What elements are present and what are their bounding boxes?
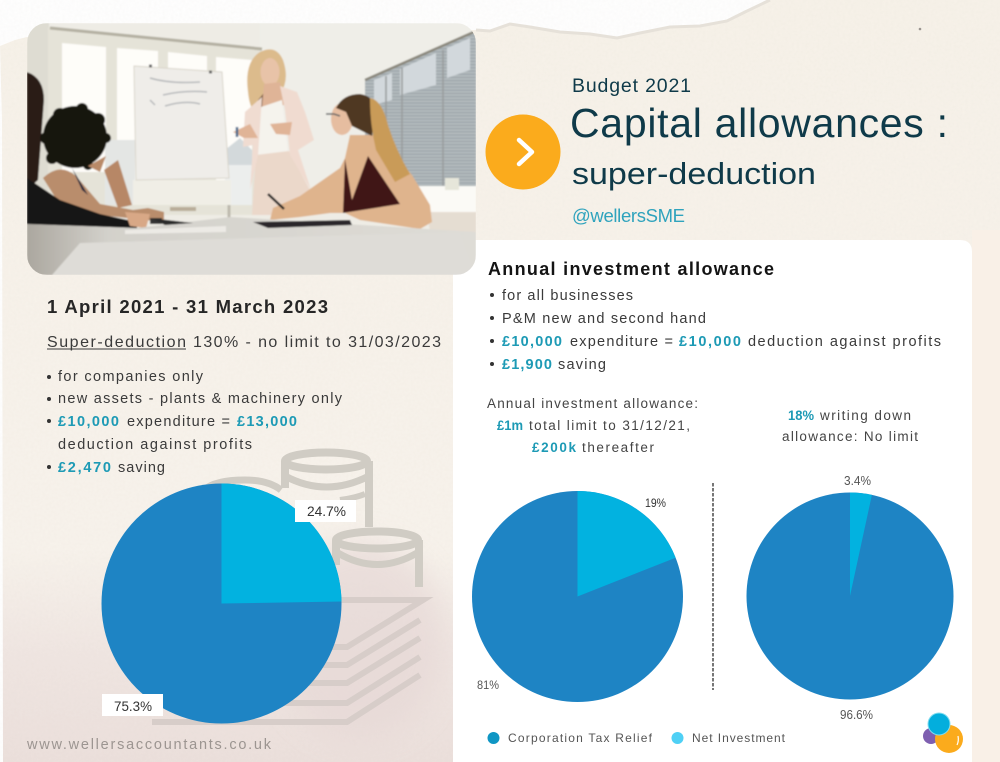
flipchart [133, 66, 231, 225]
label: 3.4%: 3.4% [844, 474, 871, 488]
seated woman with ponytail [268, 94, 432, 229]
right text block: annual investment allowance [488, 259, 941, 373]
pie chart: annual investment allowance [472, 491, 683, 702]
label: 81%: 81% [477, 680, 499, 692]
caption: writing down allowance: allowance: No limit [782, 429, 918, 444]
bullet list [490, 288, 941, 373]
bullet list: £10,000 [58, 414, 119, 430]
logo: three bubbles [923, 713, 963, 753]
legend [488, 731, 786, 745]
bullet list: £10,000 [502, 334, 562, 350]
sub-heading: super-deduction: 130% - no limit to 31/03/2023 [193, 334, 441, 351]
pie chart: writing down allowance [746, 474, 954, 722]
main title: Capital allowances : [570, 100, 948, 146]
caption: writing down allowance [782, 408, 918, 444]
table [27, 217, 476, 275]
bullet list: expenditure = [570, 334, 673, 350]
bullet list: for companies only [58, 369, 204, 385]
bullet list: £2,470 [58, 460, 111, 476]
footer: website: www.wellersaccountants.co.uk [26, 737, 272, 753]
divider: dashed line between charts [712, 483, 714, 690]
caption: annual investment allowance limits: Annual investment allowance: [487, 396, 698, 411]
label: 24.7% [295, 500, 356, 522]
presenter [233, 49, 314, 215]
label: 24.7%: 24.7% [307, 504, 346, 519]
bullet list: P&M new and second hand [502, 311, 706, 327]
pie chart: super-deduction [102, 484, 356, 724]
caption: annual investment allowance limits: £200k [532, 440, 576, 455]
caption: annual investment allowance limits [487, 396, 698, 455]
label: 19%: 19% [645, 498, 666, 510]
caption: annual investment allowance limits: thereafter [582, 440, 654, 455]
bullet list: deduction against profits [58, 437, 252, 453]
legend item: corporation tax relief: Corporation Tax Relief [508, 731, 653, 745]
caption: writing down allowance: 18% [788, 408, 814, 423]
icon: orange circle with chevron [486, 114, 560, 190]
legend item: net investment: Net Investment [692, 731, 786, 745]
bullet list: £1,900 [502, 357, 552, 373]
bullet list: saving [558, 357, 606, 373]
label: 96.6%: 96.6% [840, 708, 873, 722]
panel: white right panel [453, 240, 972, 762]
bullet list: saving [118, 460, 165, 476]
sub-heading: super-deduction: Super-deduction [47, 334, 186, 351]
window with blinds [365, 31, 476, 232]
left text block: super-deduction details [47, 296, 441, 476]
handle: @wellersSME [572, 205, 685, 226]
heading: Annual investment allowance [488, 259, 774, 279]
bullet list: expenditure = [127, 414, 230, 430]
bullet list: £10,000 [679, 334, 741, 350]
subtitle: super-deduction [572, 156, 816, 191]
bullet list: £13,000 [237, 414, 297, 430]
eyebrow: Budget 2021: Budget 2021 [572, 75, 691, 97]
caption: annual investment allowance limits: total limit to 31/12/21, [529, 418, 690, 433]
label: 75.3%: 75.3% [114, 699, 152, 714]
label: 75.3% [102, 694, 163, 716]
left seated women [27, 72, 164, 230]
photo: team meeting around a flipchart [27, 23, 476, 275]
caption: writing down allowance: writing down [819, 408, 911, 423]
title block [570, 75, 948, 226]
bullet list: for all businesses [502, 288, 633, 304]
heading: date range: 1 April 2021 - 31 March 2023 [47, 296, 328, 317]
bullet list [47, 369, 343, 476]
bullet list: new assets - plants & machinery only [58, 391, 343, 407]
caption: annual investment allowance limits: £1m [497, 418, 523, 433]
sub-heading: super-deduction [47, 334, 441, 351]
bullet list: deduction against profits [748, 334, 941, 350]
icon: faded coin stacks and notes [152, 452, 423, 722]
